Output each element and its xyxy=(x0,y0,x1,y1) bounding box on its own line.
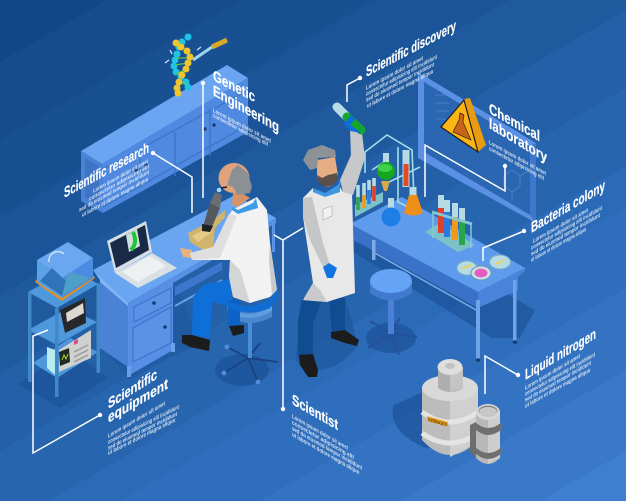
callout line: chemical laboratory xyxy=(425,145,507,197)
text block: bacteria colony xyxy=(531,177,605,264)
hand xyxy=(180,248,192,258)
chemical board on wall xyxy=(418,72,536,223)
microscope xyxy=(188,188,225,250)
callout line: scientific discovery xyxy=(347,76,362,102)
coat sleeve xyxy=(303,197,330,267)
text block: scientific equipment: equipment xyxy=(108,375,168,427)
callout line: scientific research xyxy=(151,151,192,213)
wall cabinet xyxy=(81,65,248,213)
text block: scientific discovery: sed do eiusmod tempor incididunt xyxy=(366,61,435,104)
left desk xyxy=(93,195,276,377)
collar xyxy=(232,198,258,214)
text block: scientist: consectetur adipisicing elit xyxy=(292,419,355,462)
text block: scientist: Scientist xyxy=(292,391,338,434)
small gas cylinder xyxy=(470,404,502,464)
text block: liquid nitrogen: sed do eiusmod tempor incididunt xyxy=(525,359,592,404)
text block: scientific research: sed do eiusmod tempor incididunt xyxy=(79,169,150,214)
text block: liquid nitrogen: Lorem ipsum dolor sit amet xyxy=(525,353,581,392)
callout line: bacteria colony xyxy=(483,229,526,261)
text block: scientific equipment: consectetur adipisicing elit incididunt xyxy=(108,404,180,446)
head xyxy=(218,163,250,193)
test tube rack xyxy=(425,195,475,252)
text block: scientific research: ut labore et dolore magna aliqua xyxy=(82,176,148,219)
text block: chemical laboratory: laboratory xyxy=(489,115,547,166)
text block: scientific discovery xyxy=(366,18,456,110)
laptop xyxy=(107,221,177,288)
petri dishes xyxy=(457,255,510,280)
text block: liquid nitrogen xyxy=(525,325,596,410)
text block: scientific research xyxy=(64,139,150,219)
text block: scientific equipment: Lorem ipsum dolor sit amet xyxy=(108,400,166,440)
text block: genetic engineering: Genetic xyxy=(213,68,255,106)
neck xyxy=(232,193,250,207)
legs xyxy=(298,298,323,355)
text block: genetic engineering: consectetur adipisicing elit xyxy=(213,112,269,148)
left scientist xyxy=(180,163,278,351)
text block: bacteria colony: Lorem ipsum dolor sit amet xyxy=(533,207,589,245)
incubator box xyxy=(35,242,95,301)
text block: scientist: Lorem ipsum dolor sit amet xyxy=(292,413,349,452)
callout line: liquid nitrogen xyxy=(485,356,520,394)
pocket xyxy=(323,206,332,220)
glove on flask xyxy=(344,115,362,133)
text block: bacteria colony: sed do eiusmod tempor incididunt xyxy=(531,212,601,258)
text block: scientific research: Scientific research xyxy=(64,139,149,202)
text block: scientist: ut labore et dolore magna aliqua xyxy=(292,431,359,476)
text block: scientific equipment: sed do eiusmod tempor incididunt xyxy=(108,410,178,452)
text block: scientist: sed do eiusmod tempor incididunt xyxy=(292,425,363,472)
text block: scientific equipment: ut labore et dolore magna aliqua xyxy=(108,417,175,457)
text block: chemical laboratory: Chemical xyxy=(489,100,540,145)
oscilloscope xyxy=(47,330,91,375)
text block: chemical laboratory xyxy=(489,100,547,182)
lab coat xyxy=(303,187,355,302)
raised arm xyxy=(340,130,365,195)
callout line: scientist xyxy=(274,228,303,411)
text block: scientific equipment: Scientific xyxy=(108,366,157,413)
shoes xyxy=(182,335,210,351)
lower glove xyxy=(323,263,337,278)
icon: DNA helix with pipette xyxy=(165,34,227,96)
collar xyxy=(313,180,340,197)
text block: scientific research: Lorem ipsum dolor sit amet xyxy=(93,158,149,195)
head xyxy=(317,157,338,187)
text block: liquid nitrogen: ut labore et dolore magna aliqua xyxy=(525,367,590,410)
trousers xyxy=(192,279,232,338)
floor shadows xyxy=(18,225,535,448)
text block: scientist xyxy=(292,391,363,476)
analog meter xyxy=(60,298,86,333)
callout line: scientific equipment xyxy=(33,330,102,453)
nitrogen tank: NITROGEN xyxy=(428,417,447,428)
text block: genetic engineering xyxy=(213,68,279,148)
text block: scientific discovery: ut labore et dolore magna aliqua xyxy=(367,68,433,110)
shoes xyxy=(299,354,318,377)
nitrogen tank xyxy=(422,359,478,457)
glassware on right desk xyxy=(355,135,423,226)
text block: genetic engineering: Lorem ipsum dolor sit amet xyxy=(213,107,272,145)
text block: chemical laboratory: Lorem ipsum dolor sit amet xyxy=(489,139,547,178)
text block: genetic engineering: Engineering xyxy=(213,82,279,136)
callout line: genetic engineering xyxy=(201,81,205,198)
right laboratory desk xyxy=(350,197,525,362)
text block: scientific discovery: consectetur adipisicing elit incididunt xyxy=(366,53,438,98)
text block: chemical laboratory: consectetur adipisicing elit xyxy=(489,145,545,182)
icon: warning triangle xyxy=(441,98,486,152)
right stool xyxy=(368,269,417,355)
text block: scientific research: consectetur adipisicing elit xyxy=(89,163,150,203)
shelf unit with equipment xyxy=(28,242,100,397)
text block: scientific equipment xyxy=(108,366,180,457)
text block: scientific discovery: Lorem ipsum dolor sit amet xyxy=(366,55,424,92)
right scientist xyxy=(298,107,365,377)
text block: bacteria colony: ut labore et dolore magna aliqua xyxy=(531,226,586,264)
left stool xyxy=(222,306,278,384)
lab coat xyxy=(190,197,277,303)
waist band xyxy=(224,288,278,313)
test tube xyxy=(337,107,347,117)
